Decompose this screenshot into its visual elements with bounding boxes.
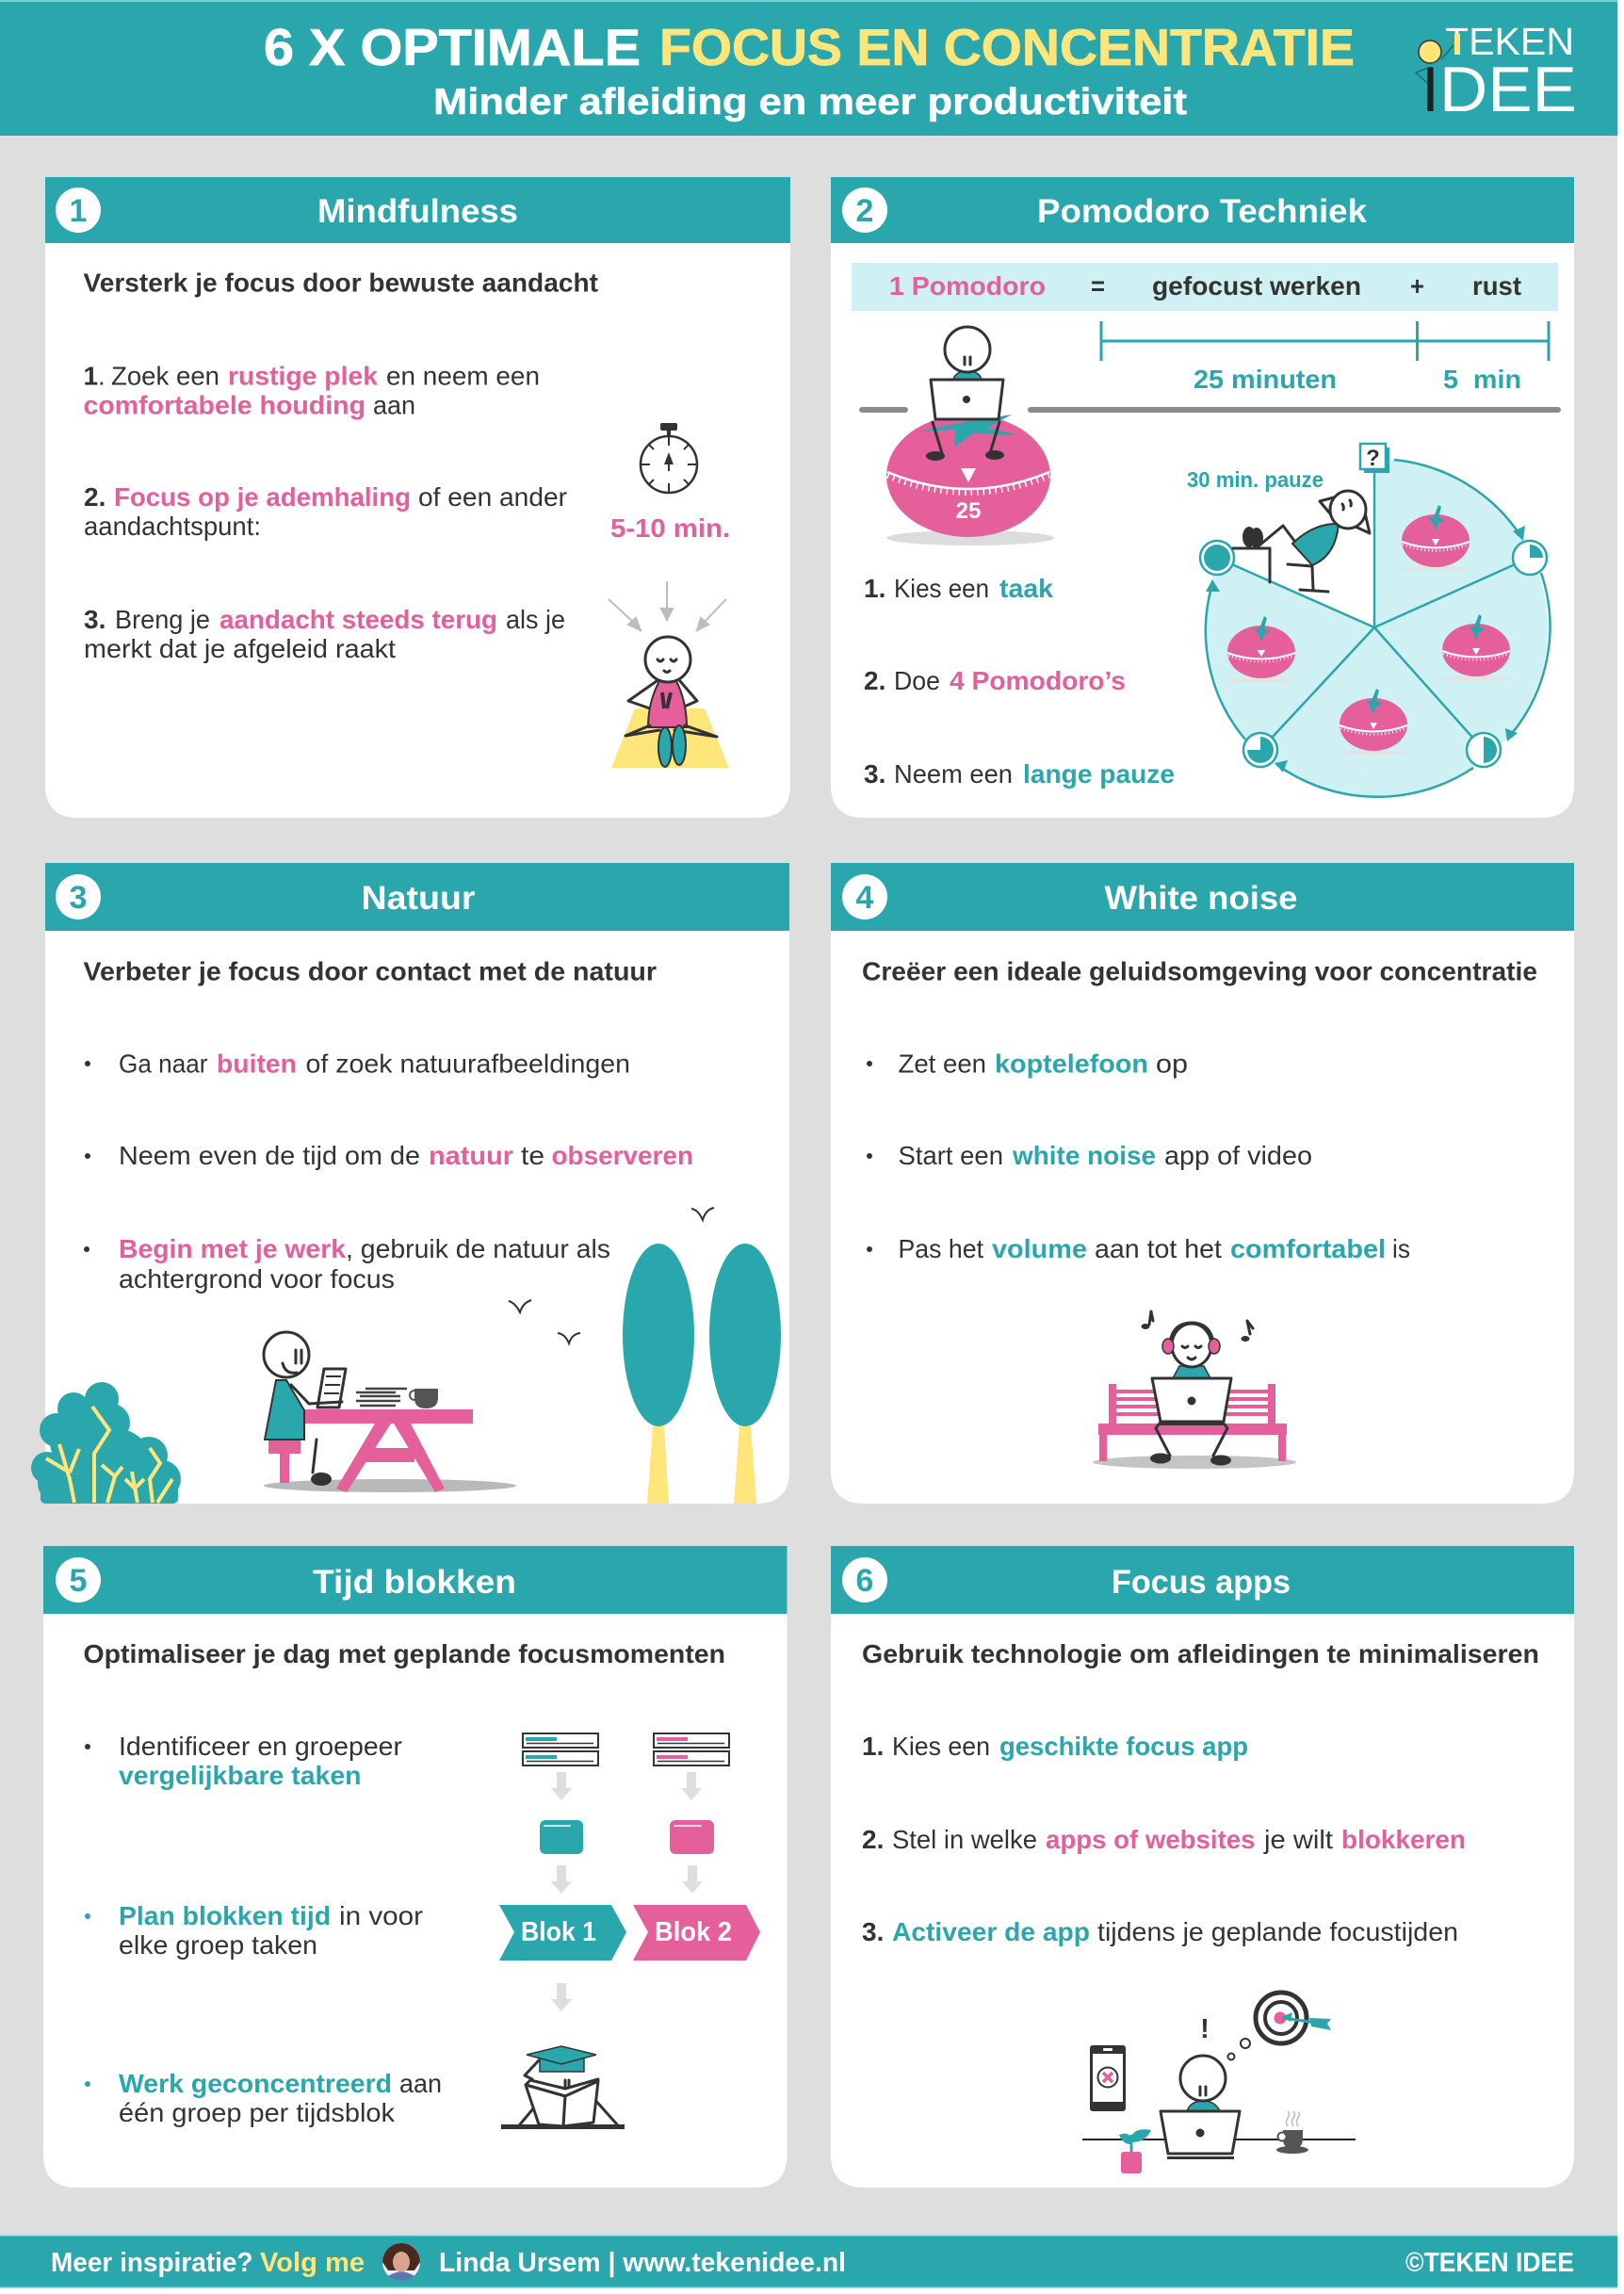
steps: Doe [894,666,940,695]
step 3: 3. [84,605,106,634]
heading: Focus apps: Focus apps [1112,1564,1291,1601]
bullet list: observeren [552,1141,693,1170]
copyright: ©TEKEN IDEE [1405,2248,1574,2278]
panel: 1 Mindfulness [45,177,790,818]
bullet list [85,1732,442,2127]
title: FOCUS EN CONCENTRATIE [659,18,1355,76]
music notes [1149,1311,1253,1334]
coffee cup [1276,2111,1308,2154]
steps: 2. [864,666,885,695]
desk line [862,407,1558,413]
steps: 1. [864,574,885,603]
bullet list: Begin met je werk [119,1234,346,1263]
pomodoro cycle wheel [1187,444,1550,798]
avatar [382,2243,420,2281]
author and website: Linda Ursem | www.tekenidee.nl [439,2248,846,2278]
bullet list: volume [992,1234,1087,1263]
steps: tijdens je geplande focustijden [1097,1917,1458,1946]
steps: Neem een [894,759,1013,789]
number badge 6: 6 [856,1563,873,1599]
bullet list: , gebruik de natuur als [346,1234,610,1263]
step 1: rustige plek [228,362,378,390]
icon: stopwatch [641,423,697,493]
bullet list: elke groep taken [119,1930,317,1960]
call to action: Meer inspiratie? [51,2248,252,2278]
number badge 2 [842,187,887,233]
step 3 [84,605,565,663]
bullet list: Ga naar [119,1049,207,1078]
arrows pointing at the head [609,581,726,630]
thought bubbles [1228,2039,1250,2059]
number badge 3: 3 [70,880,87,916]
bush [31,1382,181,1504]
steps: blokkeren [1341,1825,1466,1854]
intro text: Verbeter je focus door contact met de natuur [83,957,657,985]
heading: Mindfulness: Mindfulness [317,193,518,230]
logo: Teken Idee: DEE [1439,54,1577,125]
steps: 4 Pomodoro’s [950,666,1126,695]
steps: 3. [864,759,885,789]
heading: Natuur: Natuur [362,880,476,917]
icon: phone blocked [1090,2045,1126,2111]
bullet list: Werk geconcentreerd [119,2069,392,2098]
number badge 6 [842,1557,887,1603]
bullet list: vergelijkbare taken [119,1761,362,1790]
task cards pink [654,1733,729,1765]
number badge 1 [56,187,101,233]
panel: 4 White noise [831,863,1574,1504]
number badge 4 [842,874,887,919]
panel: 3 Natuur [31,863,789,1504]
step 1: en neem een [386,362,540,390]
step 3: Breng je [115,605,210,634]
formula bar: 1 Pomodoro [889,271,1046,301]
chevron Blok 2 [633,1905,760,1960]
logo: Teken Idee [1416,20,1577,125]
bullet list: is [1392,1234,1410,1263]
bullet list: Start een [899,1141,1003,1170]
figure at laptop [1161,2056,1240,2157]
meditating figure [611,637,729,768]
question box [1360,444,1389,473]
tomatoes [1227,505,1510,756]
steps [864,574,1175,789]
folder icons [540,1820,714,1854]
formula bar: gefocust werken [1152,271,1361,301]
step 2: 2. [84,482,106,512]
chevron Blok 1: Blok 1 [521,1917,596,1947]
title: 6 X OPTIMALE [264,18,641,76]
bullet list: natuur [429,1141,513,1170]
bullet list: Identificeer en groepeer [119,1732,402,1761]
footer bar [0,2235,1617,2288]
number badge 3 [56,874,101,919]
bullet list: aan [399,2069,442,2098]
plant [1119,2129,1151,2173]
number badge 5: 5 [70,1563,87,1599]
chevron Blok 1 [499,1905,626,1960]
panel: 5 Tijd blokken [43,1546,788,2188]
number badge 5 [56,1557,101,1603]
desk line [1082,2139,1356,2140]
heading: White noise: White noise [1104,880,1298,917]
step 1 [83,362,540,420]
step 1: aan [373,390,415,420]
number badge 1: 1 [70,193,87,229]
step 1: Zoek een [111,362,219,390]
exclamation mark: ! [1200,2014,1210,2044]
formula bar: + [1410,271,1424,301]
steps: Kies een [892,1732,990,1761]
bullet list: white noise [1012,1141,1156,1170]
intro text: Creëer een ideale geluidsomgeving voor concentratie [862,957,1537,985]
steps: 1. [862,1732,884,1761]
steps: 2. [862,1825,884,1854]
label: duration: 5-10 min. [610,513,730,543]
intro text: Optimaliseer je dag met geplande focusmomenten [83,1639,725,1668]
logo: Teken Idee: I [1421,54,1439,125]
bullet list [84,1049,693,1293]
heading: Tijd blokken: Tijd blokken [313,1564,516,1601]
steps: taak [999,574,1053,603]
step 2: of een ander [418,482,567,512]
steps: Activeer de app [892,1917,1090,1946]
step 2 [84,482,567,541]
steps: Kies een [894,574,989,603]
bullet list: achtergrond voor focus [119,1264,395,1293]
timeline: 25 minuten [1194,365,1337,394]
grey flow arrows [551,1772,703,2011]
chevron Blok 2: Blok 2 [655,1917,732,1947]
bullet list: Pas het [899,1234,983,1263]
task cards teal [523,1733,598,1765]
step 2: aandachtspunt: [84,512,261,541]
figure on bench with headphones [1093,1311,1296,1469]
title [264,18,1355,76]
question box: ? [1366,446,1380,471]
figure on tomato timer [886,327,1054,545]
icon: target with dart [1256,1993,1331,2043]
bullet list: aan tot het [1095,1234,1222,1263]
birds [509,1208,714,1343]
figure reading book [501,2046,625,2129]
intro text: Gebruik technologie om afleidingen te minimaliseren [862,1639,1539,1668]
step 3: merkt dat je afgeleid raakt [84,634,396,663]
steps: lange pauze [1023,759,1175,789]
trees [623,1244,781,1504]
steps: geschikte focus app [999,1732,1248,1761]
timeline: 5 min [1443,365,1521,394]
steps: Stel in welke [892,1825,1037,1854]
steps: je wilt [1263,1825,1333,1854]
formula bar: = [1091,271,1105,301]
formula bar [852,263,1558,311]
step 1: . [98,362,106,390]
bullet list: koptelefoon [995,1049,1148,1078]
step 1: 1 [83,362,98,390]
bullet list: te [521,1141,544,1170]
bullet list: Neem even de tijd om de [119,1141,420,1170]
panel: 6 Focus apps [831,1546,1574,2188]
bullet list: Zet een [899,1049,986,1078]
number badge 4: 4 [856,880,874,916]
heading: Pomodoro Techniek: Pomodoro Techniek [1037,193,1368,230]
header banner [0,0,1617,136]
figure at picnic table [264,1332,516,1492]
bullet list: één groep per tijdsblok [119,2098,396,2127]
steps [862,1732,1466,1946]
reclining figure [1233,491,1370,592]
bullet list: app of video [1164,1141,1312,1170]
panel: 2 Pomodoro Techniek [831,177,1574,818]
subtitle: Minder afleiding en meer productiviteit [433,82,1187,122]
step 3: als je [506,605,565,634]
bullet list: in voor [339,1901,423,1930]
call to action [51,2248,365,2278]
bullet list: op [1156,1049,1188,1078]
bullet list [867,1049,1410,1263]
steps: 3. [862,1917,884,1946]
label: long break: 30 min. pauze [1187,467,1324,492]
steps: apps of websites [1046,1825,1255,1854]
call to action: Volg me [260,2248,365,2278]
bullet list: comfortabel [1230,1234,1386,1263]
intro text: Versterk je focus door bewuste aandacht [83,268,598,298]
step 1: comfortabele houding [83,390,365,420]
timeline [1101,321,1549,394]
progress clocks [1200,541,1547,767]
bullet list: of zoek natuurafbeeldingen [305,1049,630,1078]
step 2: Focus op je ademhaling [114,482,411,512]
number badge 2: 2 [856,193,873,229]
step 3: aandacht steeds terug [219,605,497,634]
formula bar: rust [1472,271,1521,301]
bullet list: buiten [217,1049,297,1078]
figure on tomato timer: 25 [956,498,981,524]
logo: Teken Idee: TEKEN [1445,20,1574,63]
bullet list: Plan blokken tijd [119,1901,331,1930]
